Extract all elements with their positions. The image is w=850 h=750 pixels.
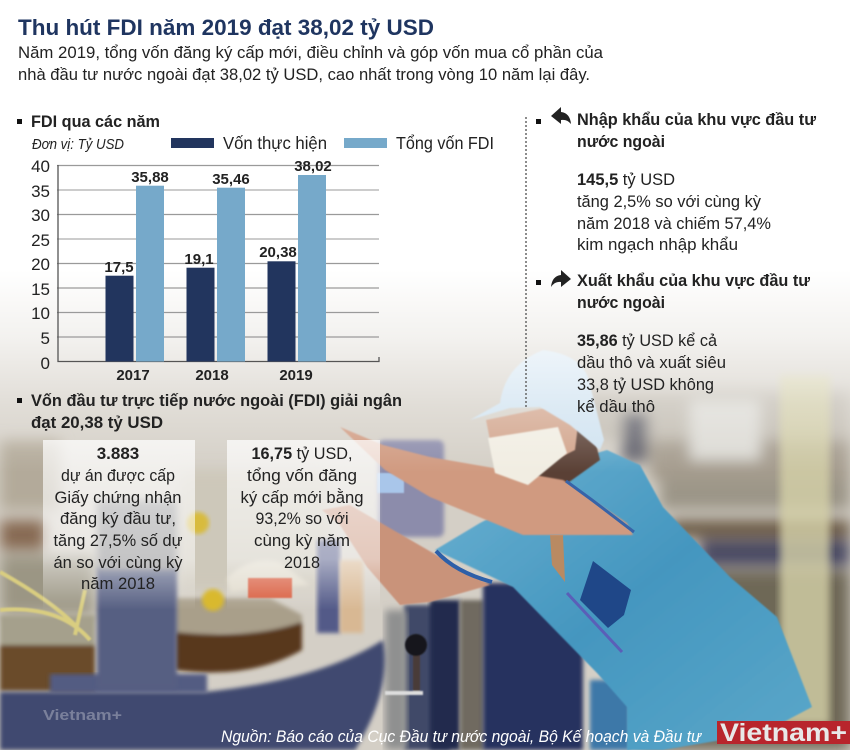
bar chart: 15 (31, 280, 50, 299)
imports body: kim ngạch nhập khẩu (577, 235, 738, 254)
panel: 3.883 projects: Giấy chứng nhận (54, 488, 182, 507)
panel: 16,75 billion USD (227, 440, 380, 610)
bar chart: 5 (41, 329, 50, 348)
upper arm (340, 427, 633, 535)
logo: Vietnam+: Vietnam+ (720, 719, 847, 747)
lower arm (322, 505, 490, 605)
exports heading (577, 271, 811, 312)
bar chart: 2019 (279, 367, 313, 384)
panel: 16,75 billion USD: tổng vốn đăng (247, 466, 357, 485)
panel: 16,75 billion USD: cùng kỳ năm (254, 531, 350, 550)
panel: 3.883 projects: án so với cùng kỳ (54, 553, 183, 572)
exports heading: Xuất khẩu của khu vực đầu tư (577, 271, 811, 290)
bar chart: 35,88 (131, 169, 169, 186)
exports body: dầu thô và xuất siêu (577, 353, 726, 372)
bar chart: 19,1 (184, 251, 214, 268)
face (486, 405, 578, 470)
imports body: năm 2018 và chiếm 57,4% (577, 214, 771, 233)
heading: FDI disbursement: Vốn đầu tư trực tiếp nước ngoài (FDI) giải ngân (31, 391, 402, 410)
table (0, 640, 385, 750)
imports heading: Nhập khẩu của khu vực đầu tư (577, 110, 817, 129)
bar chart: 10 (31, 304, 50, 323)
bar chart: 35 (31, 182, 50, 201)
legend: Tổng vốn FDI (396, 133, 494, 153)
panel: 16,75 billion USD: 93,2% so với (256, 509, 348, 528)
panel: 3.883 projects: dự án được cấp (61, 466, 175, 485)
mask (488, 427, 567, 485)
shirt (435, 450, 812, 750)
chest gap (550, 535, 565, 582)
intro text: Năm 2019, tổng vốn đăng ký cấp mới, điều chỉnh và góp vốn mua cổ phần của (18, 43, 604, 62)
exports body: 35,86 tỷ USD kể cả (577, 331, 718, 350)
imports body: tăng 2,5% so với cùng kỳ (577, 192, 761, 211)
bar chart: 20 (31, 255, 50, 274)
curtain (780, 375, 830, 725)
panel: 3.883 projects: 3.883 (97, 444, 139, 463)
legend (171, 133, 494, 153)
source: Nguồn: Báo cáo của Cục Đầu tư nước ngoài, Bộ Kế hoạch và Đầu tư (221, 727, 702, 746)
imports body (577, 170, 771, 254)
exports body: kể dầu thô (577, 397, 655, 416)
panel: 3.883 projects: đăng ký đầu tư, (60, 509, 176, 528)
heading: FDI disbursement: đạt 20,38 tỷ USD (31, 413, 163, 432)
bar chart: 35,46 (212, 171, 250, 188)
disc (0, 598, 302, 691)
heading: FDI qua các năm: FDI qua các năm (31, 112, 160, 131)
imports body: 145,5 tỷ USD (577, 170, 675, 189)
icon: import arrow (551, 107, 571, 124)
panel: 3.883 projects: năm 2018 (81, 574, 155, 593)
exports body: 33,8 tỷ USD không (577, 375, 714, 394)
bar chart: 38,02 (294, 158, 332, 175)
bar chart: 30 (31, 206, 50, 225)
legend: Vốn thực hiện (223, 133, 327, 153)
exports body (577, 331, 726, 416)
bar chart: 2017 (116, 367, 150, 384)
panel: exports (536, 270, 811, 416)
bar chart: 40 (31, 157, 50, 176)
panel: 16,75 billion USD: ký cấp mới bằng (240, 488, 364, 507)
panel: imports (536, 107, 817, 254)
title: Thu hút FDI năm 2019 đạt 38,02 tỷ USD (18, 15, 434, 40)
bar chart: 0 (41, 354, 50, 373)
bar chart: 20,38 (259, 244, 297, 261)
bar chart: 25 (31, 231, 50, 250)
watermark: Vietnam+ (43, 707, 122, 724)
icon: export arrow (551, 270, 571, 287)
bar chart: 17,5 (104, 259, 134, 276)
machine panel (378, 440, 444, 537)
neck and hair (530, 420, 600, 485)
dotted divider (525, 117, 527, 408)
imports heading: nước ngoài (577, 132, 665, 151)
navy blocks right of machine (404, 605, 450, 750)
worker (322, 350, 812, 750)
intro text (18, 43, 604, 84)
exports heading: nước ngoài (577, 293, 665, 312)
pocket (580, 561, 631, 628)
yellow parts and threads (202, 589, 224, 611)
imports heading (577, 110, 817, 151)
intro text: nhà đầu tư nước ngoài đạt 38,02 tỷ USD, cao nhất trong vòng 10 năm lại đây. (18, 65, 590, 84)
panel: FDI chart (17, 112, 494, 384)
bar chart: 2018 (195, 367, 229, 384)
bar chart (31, 157, 379, 384)
unit label: Đơn vị: Tỷ USD (32, 137, 124, 153)
heading: FDI disbursement (17, 391, 402, 432)
panel: 16,75 billion USD: 16,75 tỷ USD, (252, 444, 352, 463)
panel: 16,75 billion USD: 2018 (284, 553, 320, 572)
blue pole (97, 567, 177, 689)
knob (385, 634, 427, 695)
cap (470, 350, 604, 450)
panel: 3.883 projects (43, 440, 195, 610)
panel: 3.883 projects: tăng 27,5% số dự (54, 531, 182, 550)
